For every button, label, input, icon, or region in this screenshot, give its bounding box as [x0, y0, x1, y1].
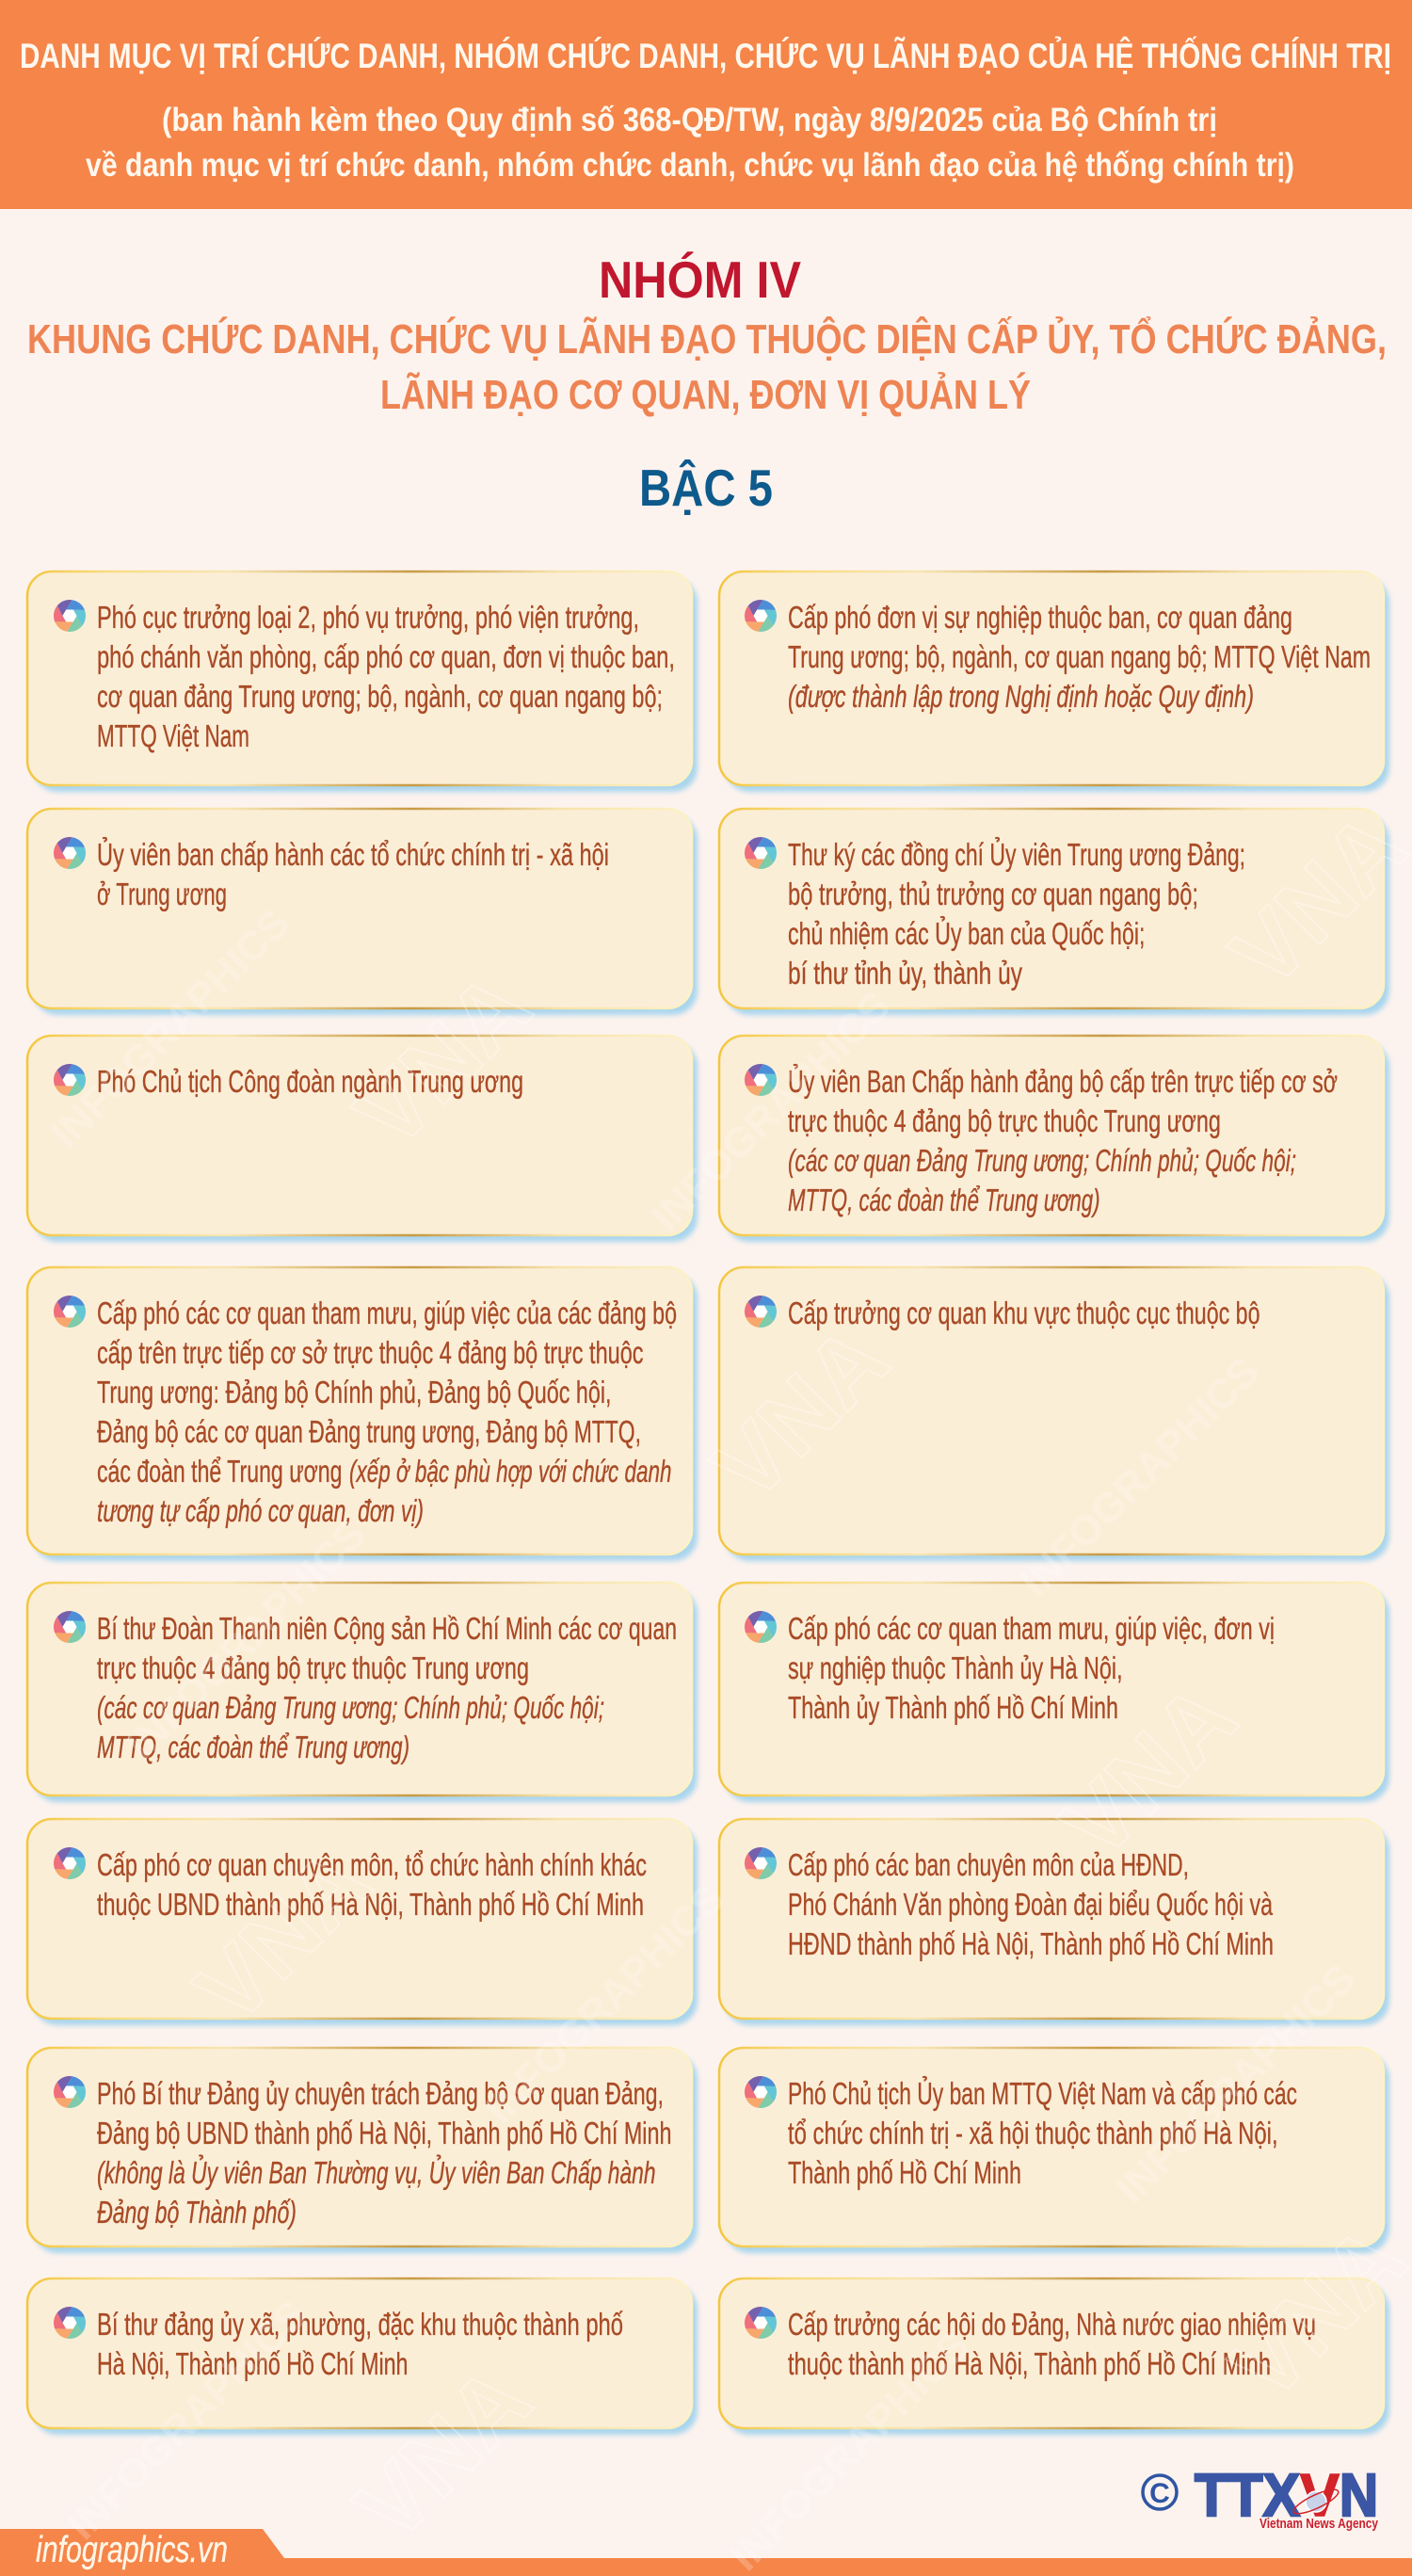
card row 2 left [27, 809, 698, 1015]
card text: bí thư tỉnh ủy, thành ủy [788, 956, 1022, 990]
icon: aperture [50, 1608, 89, 1646]
icon: aperture [741, 2073, 780, 2111]
card text [97, 1847, 647, 1922]
watermarks: INFOGRAPHICS [642, 983, 900, 1240]
copyright symbol: C [1149, 2478, 1170, 2509]
card row 7 right [719, 2048, 1389, 2253]
watermarks: VNA [175, 1828, 391, 2044]
heading: level: BẬC 5 [639, 459, 773, 517]
card text: Ủy viên ban chấp hành các tổ chức chính trị - xã hội [97, 837, 609, 872]
card text: Đảng bộ các cơ quan Đảng trung ương, Đảng bộ MTTQ, [97, 1414, 641, 1449]
card text [788, 1064, 1338, 1217]
card text [97, 1296, 677, 1528]
card text: Trung ương: Đảng bộ Chính phủ, Đảng bộ Quốc hội, [97, 1375, 612, 1409]
icon: aperture [741, 1844, 780, 1882]
card text: Thành phố Hồ Chí Minh [788, 2155, 1021, 2190]
card text: bộ trưởng, thủ trưởng cơ quan ngang bộ; [788, 877, 1198, 911]
heading: framework title [27, 314, 1387, 418]
header subtitle [86, 102, 1294, 184]
logo: TTXVN: Vietnam News Agency [1260, 2516, 1379, 2532]
watermarks: INFOGRAPHICS [721, 2323, 979, 2576]
card row 6 right [719, 1819, 1389, 2025]
card text: Đảng bộ UBND thành phố Hà Nội, Thành phố Hồ Chí Minh [97, 2116, 672, 2150]
card text: (xếp ở bậc phù hợp với chức danh [349, 1454, 672, 1489]
card text: tương tự cấp phó cơ quan, đơn vị) [97, 1493, 424, 1528]
heading: group: NHÓM IV [599, 250, 801, 309]
icon: aperture [741, 597, 780, 635]
card row 5 right [719, 1583, 1389, 1802]
icon: aperture [741, 1293, 780, 1330]
card row 3 left [27, 1036, 698, 1242]
card text: MTTQ, các đoàn thể Trung ương) [788, 1183, 1100, 1217]
icon: aperture [741, 1608, 780, 1646]
icon: aperture [50, 2304, 89, 2342]
card text [788, 2076, 1297, 2190]
watermarks [41, 793, 1412, 2576]
card text: sự nghiệp thuộc Thành ủy Hà Nội, [788, 1650, 1123, 1685]
card text: cấp trên trực tiếp cơ sở trực thuộc 4 đảng bộ trực thuộc [97, 1335, 644, 1370]
card text: Phó Chủ tịch Công đoàn ngành Trung ương [97, 1064, 523, 1099]
card row 6 left [27, 1819, 698, 2025]
watermarks: INFOGRAPHICS [475, 1876, 733, 2133]
footer bar [0, 2529, 1412, 2576]
card text [788, 1847, 1274, 1961]
watermarks: INFOGRAPHICS [41, 900, 299, 1157]
card text: (không là Ủy viên Ban Thường vụ, Ủy viên Ban Chấp hành [97, 2154, 655, 2190]
card text [97, 837, 609, 911]
card text: thuộc UBND thành phố Hà Nội, Thành phố Hồ Chí Minh [97, 1887, 644, 1922]
watermarks: VNA [335, 2346, 551, 2562]
card text: Cấp phó cơ quan chuyên môn, tổ chức hành chính khác [97, 1847, 647, 1882]
card text [97, 600, 675, 753]
card text [788, 2307, 1316, 2381]
icon: aperture [50, 1293, 89, 1330]
watermarks: INFOGRAPHICS [1011, 1348, 1269, 1605]
card row 8 left [27, 2278, 698, 2435]
card row 1 right [719, 572, 1389, 792]
card row 5 left [27, 1583, 698, 1802]
card text: Phó Bí thư Đảng ủy chuyên trách Đảng bộ Cơ quan Đảng, [97, 2076, 664, 2111]
watermarks: INFOGRAPHICS [58, 2292, 316, 2549]
watermarks: VNA [1041, 1664, 1257, 1879]
card row 4 left [27, 1267, 698, 1561]
icon: aperture [741, 834, 780, 872]
icon: aperture [50, 834, 89, 872]
card row 4 right [719, 1267, 1389, 1561]
card text: Bí thư đảng ủy xã, phường, đặc khu thuộc thành phố [97, 2307, 623, 2342]
logo: TTXVN: V [1300, 2461, 1340, 2529]
card text: các đoàn thể Trung ương [97, 1454, 343, 1489]
logo: TTXVN: N [1340, 2461, 1378, 2529]
card text [97, 2307, 623, 2381]
card text: phó chánh văn phòng, cấp phó cơ quan, đơn vị thuộc ban, [97, 639, 675, 674]
card text [97, 1611, 677, 1764]
card text: Phó cục trưởng loại 2, phó vụ trưởng, phó viện trưởng, [97, 600, 639, 635]
header subtitle: (ban hành kèm theo Quy định số 368-QĐ/TW, ngày 8/9/2025 của Bộ Chính trị [162, 102, 1217, 138]
watermarks: INFOGRAPHICS [118, 1511, 376, 1768]
card text: Hà Nội, Thành phố Hồ Chí Minh [97, 2346, 409, 2381]
card text [788, 1611, 1275, 1725]
card text: cơ quan đảng Trung ương; bộ, ngành, cơ quan ngang bộ; [97, 679, 663, 714]
icon: aperture [50, 1061, 89, 1099]
icon: aperture [50, 1844, 89, 1882]
card text: chủ nhiệm các Ủy ban của Quốc hội; [788, 916, 1145, 951]
header banner [0, 0, 1412, 209]
heading: framework title: LÃNH ĐẠO CƠ QUAN, ĐƠN VỊ QUẢN LÝ [380, 371, 1031, 418]
card text: Đảng bộ Thành phố) [97, 2195, 297, 2230]
card text: MTTQ, các đoàn thể Trung ương) [97, 1730, 409, 1764]
icon: aperture [50, 2073, 89, 2111]
card text [788, 837, 1245, 990]
card text: trực thuộc 4 đảng bộ trực thuộc Trung ương [788, 1103, 1221, 1138]
card text: Bí thư Đoàn Thanh niên Cộng sản Hồ Chí Minh các cơ quan [97, 1611, 677, 1646]
card text [788, 600, 1371, 714]
card row 2 right [719, 809, 1389, 1015]
icon: aperture [741, 1061, 780, 1099]
card row 3 right [719, 1036, 1389, 1242]
card row 1 left [27, 572, 698, 792]
footer site name: infographics.vn [36, 2530, 228, 2570]
card row 7 left [27, 2048, 698, 2253]
card text: ở Trung ương [97, 877, 227, 911]
card text: Thành ủy Thành phố Hồ Chí Minh [788, 1690, 1118, 1725]
logo: TTXVN [1195, 2461, 1379, 2532]
watermarks: VNA [335, 953, 551, 1168]
card text [97, 2076, 672, 2230]
watermarks: VNA [693, 1306, 908, 1521]
card text: trực thuộc 4 đảng bộ trực thuộc Trung ương [97, 1650, 529, 1685]
card text: (các cơ quan Đảng Trung ương; Chính phủ; Quốc hội; [97, 1690, 604, 1725]
card text: Cấp phó các cơ quan tham mưu, giúp việc của các đảng bộ [97, 1296, 677, 1330]
card text: Cấp phó các ban chuyên môn của HĐND, [788, 1847, 1189, 1882]
copyright symbol [1143, 2475, 1177, 2509]
card text: MTTQ Việt Nam [97, 718, 249, 753]
watermarks: INFOGRAPHICS [1107, 1956, 1365, 2213]
card row 8 right [719, 2278, 1389, 2435]
icon: aperture [741, 2304, 780, 2342]
icon: aperture [50, 597, 89, 635]
logo: TTXVN: TTX [1195, 2461, 1300, 2529]
